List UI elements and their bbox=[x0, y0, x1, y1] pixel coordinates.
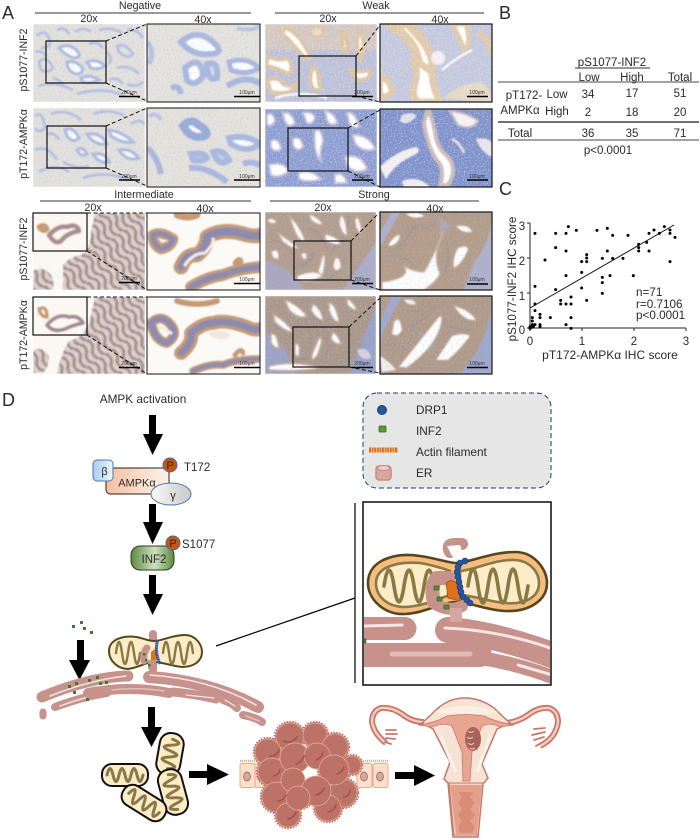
endoplasmic reticulum bbox=[42, 675, 262, 722]
heading: Weak bbox=[275, 0, 484, 26]
cavity and wall band bbox=[418, 714, 514, 781]
arrow: activation to AMPK bbox=[143, 415, 163, 455]
micrograph: intermediate pT172 20x bbox=[33, 297, 145, 374]
micrograph: weak pT172 40x bbox=[380, 110, 492, 186]
micrograph: weak pS1077 20x bbox=[265, 24, 377, 102]
INF2 with S1077 phosphate bbox=[131, 536, 215, 570]
micrograph: negative pS1077 20x bbox=[33, 24, 145, 102]
heading: Strong: 40x bbox=[426, 203, 444, 215]
heading: Weak: 20x bbox=[319, 13, 337, 25]
free INF2 particles bbox=[72, 621, 93, 634]
micrograph: weak pS1077 40x bbox=[380, 24, 492, 102]
contingency table: 51 bbox=[674, 88, 686, 100]
AMPK complex with T172 phosphate bbox=[93, 458, 210, 505]
uterine body bbox=[422, 698, 510, 837]
side bar of detail bbox=[354, 503, 356, 683]
legend item: ER: ER bbox=[416, 466, 432, 480]
zoom boxes, connectors and scale bars for the micrographs: 200μm bbox=[121, 276, 137, 282]
contingency table: pS1077-INF2 bbox=[578, 57, 646, 69]
AMPK complex with T172 phosphate: T172 bbox=[184, 462, 210, 474]
row label: pS1077-INF2 upper: pS1077-INF2 bbox=[18, 28, 30, 92]
micrograph: intermediate pS1077 40x bbox=[148, 214, 260, 290]
scatter plot: 1 bbox=[579, 336, 585, 348]
heading: Negative: 40x bbox=[194, 14, 212, 26]
INF2 on ER bbox=[68, 676, 108, 701]
epithelial cells right bbox=[357, 761, 388, 788]
text: AMPK activation: AMPK activation bbox=[100, 392, 186, 406]
scatter plot: pS1077-INF2 IHC score bbox=[506, 217, 519, 341]
arrow: mitochondria to tumor bbox=[189, 764, 229, 785]
AMPK complex with T172 phosphate: γ bbox=[170, 490, 176, 502]
micrograph: strong pT172 20x bbox=[265, 296, 376, 374]
detail ER tubules bbox=[350, 625, 570, 680]
cervix and vagina bbox=[449, 783, 483, 835]
AMPK complex with T172 phosphate: AMPKα bbox=[118, 478, 156, 490]
panel letter D: D bbox=[2, 390, 15, 410]
epithelial cells left bbox=[240, 761, 270, 788]
zoom boxes, connectors and scale bars for the micrographs: 100μm bbox=[469, 174, 485, 180]
contingency table: pT172- bbox=[506, 90, 542, 102]
micrograph: intermediate pS1077 20x bbox=[33, 213, 145, 290]
heading: Strong: 20x bbox=[314, 202, 332, 214]
zoom boxes, connectors and scale bars for the micrographs: 200μm bbox=[354, 174, 370, 180]
zoom boxes, connectors and scale bars for the micrographs bbox=[33, 24, 492, 374]
legend item: ER bbox=[376, 466, 432, 480]
legend item: DRP1: DRP1 bbox=[416, 403, 447, 417]
contingency table: Low bbox=[546, 89, 568, 101]
AMPK complex with T172 phosphate: P bbox=[166, 460, 174, 472]
zoom boxes, connectors and scale bars for the micrographs: 200μm bbox=[354, 361, 370, 367]
heading: Negative: Negative bbox=[119, 0, 161, 12]
scatter plot: 1 bbox=[519, 291, 525, 303]
heading: Negative bbox=[35, 0, 251, 26]
row label: pT172-AMPKα upper: pT172-AMPKα bbox=[18, 109, 30, 179]
legend item: DRP1 bbox=[378, 403, 447, 417]
detail mitochondrion bbox=[368, 552, 547, 614]
contingency table: 2 bbox=[585, 107, 591, 119]
zoom boxes, connectors and scale bars for the micrographs: 100μm bbox=[239, 174, 255, 180]
INF2 with S1077 phosphate: INF2 bbox=[142, 554, 166, 566]
panel letter C: C bbox=[499, 179, 512, 199]
zoom boxes, connectors and scale bars for the micrographs: 200μm bbox=[121, 361, 137, 367]
legend item: INF2 bbox=[379, 424, 442, 438]
fragmented mitochondria bbox=[102, 731, 191, 825]
zoom boxes, connectors and scale bars for the micrographs: 100μm bbox=[469, 277, 485, 283]
detail ER wrapping the mitochondrion bbox=[433, 544, 465, 622]
contingency table: 36 bbox=[582, 128, 594, 140]
legend panel bbox=[363, 393, 551, 488]
detail DRP1 chain bbox=[454, 558, 473, 606]
micrograph: strong pS1077 20x bbox=[265, 212, 376, 290]
zoom boxes, connectors and scale bars for the micrographs: 200μm bbox=[121, 90, 137, 96]
scatter plot: p<0.0001 bbox=[636, 309, 685, 322]
detail INF2 squares bbox=[364, 586, 449, 643]
contingency table: p<0.0001 bbox=[584, 145, 632, 157]
contingency table bbox=[498, 57, 699, 157]
zoom boxes, connectors and scale bars for the micrographs: 100μm bbox=[469, 90, 485, 96]
AMPK complex with T172 phosphate: β bbox=[101, 466, 108, 478]
contingency table: 35 bbox=[626, 128, 638, 140]
micrograph: strong pT172 40x bbox=[380, 296, 492, 374]
zoom boxes, connectors and scale bars for the micrographs: 200μm bbox=[121, 174, 137, 180]
contingency table: Low bbox=[578, 72, 600, 84]
legend item: Actin filament: Actin filament bbox=[416, 445, 488, 459]
contingency table: Total bbox=[508, 128, 532, 140]
micrograph: strong pS1077 40x bbox=[380, 212, 492, 290]
zoom boxes, connectors and scale bars for the micrographs: 100μm bbox=[239, 361, 255, 367]
zoom boxes, connectors and scale bars for the micrographs: 100μm bbox=[239, 277, 255, 283]
contingency table: 18 bbox=[626, 107, 638, 119]
scatter plot: r=0.7106 bbox=[636, 298, 682, 311]
panel letter A: A bbox=[2, 3, 14, 23]
scatter plot: 0 bbox=[527, 336, 533, 348]
heading: Strong bbox=[270, 189, 479, 215]
INF2 with S1077 phosphate: P bbox=[169, 538, 177, 550]
legend item: INF2: INF2 bbox=[416, 424, 442, 438]
contingency table: 71 bbox=[674, 128, 686, 140]
scatter plot bbox=[506, 217, 689, 362]
arrow: ER to fragmented mitochondria bbox=[141, 707, 162, 747]
zoom boxes, connectors and scale bars for the micrographs: 100μm bbox=[239, 90, 255, 96]
heading: Weak: 40x bbox=[431, 14, 449, 26]
micrograph: weak pT172 20x bbox=[265, 109, 377, 187]
scatter plot: pT172-AMPKα IHC score bbox=[542, 348, 678, 362]
arrow: INF2 to ER bbox=[69, 640, 90, 680]
zoom boxes, connectors and scale bars for the micrographs: 200μm bbox=[354, 90, 370, 96]
detail panel: mitochondrion fission at ER bbox=[362, 501, 552, 686]
heading: Intermediate: 20x bbox=[84, 202, 102, 214]
line linking small mitochondrion to detail bbox=[216, 598, 355, 646]
legend item: Actin filament bbox=[369, 445, 488, 459]
fallopian tubes bbox=[372, 708, 558, 746]
contingency table: 20 bbox=[674, 107, 686, 119]
contingency table: High bbox=[620, 72, 644, 84]
panel letter B: B bbox=[499, 3, 511, 23]
scatter plot: 0 bbox=[519, 325, 525, 337]
small mitochondrion at ER contact bbox=[109, 634, 202, 670]
heading: Intermediate: Intermediate bbox=[114, 189, 174, 201]
scatter plot: 2 bbox=[519, 256, 525, 268]
scatter plot: 3 bbox=[519, 221, 525, 233]
contingency table: 34 bbox=[582, 89, 595, 101]
contingency table: 17 bbox=[626, 88, 638, 100]
arrow: tumor to uterus bbox=[395, 765, 435, 786]
zoom boxes, connectors and scale bars for the micrographs: 100μm bbox=[469, 361, 485, 367]
micrograph: negative pT172 20x bbox=[33, 108, 145, 187]
tumor cells bbox=[254, 722, 362, 828]
scatter plot: 3 bbox=[683, 336, 689, 348]
heading: Weak: Weak bbox=[362, 0, 390, 12]
heading: Intermediate: 40x bbox=[196, 203, 214, 215]
row label: pT172-AMPKα lower: pT172-AMPKα bbox=[18, 300, 30, 370]
zoom boxes, connectors and scale bars for the micrographs: 200μm bbox=[354, 277, 370, 283]
micrograph: negative pT172 40x bbox=[148, 108, 260, 186]
uterine tumor bbox=[465, 727, 481, 751]
contingency table: Total bbox=[668, 72, 692, 84]
INF2 with S1077 phosphate: S1077 bbox=[182, 539, 215, 551]
epithelium and tumor cluster bbox=[240, 722, 388, 828]
micrograph: intermediate pT172 40x bbox=[148, 298, 260, 374]
contingency table: High bbox=[545, 106, 569, 118]
heading: Strong: Strong bbox=[358, 189, 390, 201]
arrow: AMPK to INF2 bbox=[143, 504, 163, 544]
uterus with tumor bbox=[372, 698, 558, 837]
contingency table: AMPKα bbox=[500, 105, 540, 117]
row label: pS1077-INF2 lower: pS1077-INF2 bbox=[18, 217, 30, 281]
micrograph: negative pS1077 40x bbox=[148, 24, 260, 102]
heading: Negative: 20x bbox=[80, 13, 98, 25]
scatter plot: n=71 bbox=[636, 286, 662, 299]
arrow: INF2 to mitochondrion bbox=[143, 575, 163, 615]
heading: Intermediate bbox=[40, 189, 251, 215]
scatter plot: 2 bbox=[631, 336, 637, 348]
detail actin bbox=[446, 581, 460, 601]
